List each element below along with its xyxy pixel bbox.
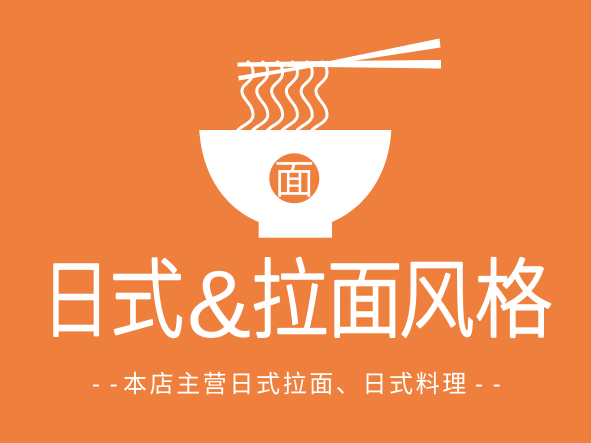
subtitle: - - <box>92 371 119 398</box>
title: 日 <box>41 252 111 349</box>
icon: bowl emblem circle <box>269 153 319 203</box>
icon: ramen bowl with noodles and chopsticks <box>199 38 441 238</box>
title: 格 <box>475 253 552 349</box>
icon: bowl <box>199 130 391 238</box>
title: 拉 <box>251 253 328 349</box>
title: & <box>187 251 251 358</box>
icon: noodles <box>238 62 327 130</box>
icon: chopsticks <box>238 38 441 80</box>
subtitle: - - <box>475 371 502 398</box>
title: 风 <box>399 254 475 349</box>
title: 式 <box>110 252 184 348</box>
subtitle: 本店主营日式拉面、日式料理 <box>123 371 469 398</box>
title: 面 <box>327 254 403 349</box>
icon: bowl emblem character: 面 <box>274 158 314 202</box>
title <box>41 251 552 358</box>
